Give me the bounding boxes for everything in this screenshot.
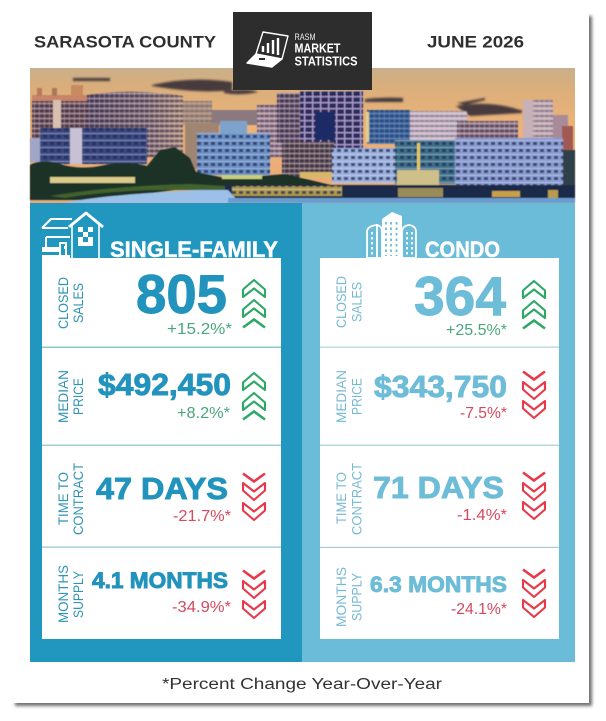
row: time to contract: -1.4%* [457, 507, 507, 524]
row: time to contract: -21.7%* [173, 508, 231, 525]
row: months supply: MONTHS [334, 567, 349, 627]
row: closed sales: +25.5%* [446, 322, 507, 339]
panel heading: single-family: SINGLE-FAMILY [110, 237, 278, 262]
heading: date: JUNE 2026 [427, 32, 524, 52]
panel heading: condo: CONDO [425, 237, 500, 262]
row: closed sales [56, 263, 265, 338]
footnote: *Percent Change Year-Over-Year [162, 676, 442, 693]
icon: house [42, 213, 103, 258]
row: months supply: 6.3 MONTHS [370, 572, 507, 597]
row: median price [334, 369, 545, 423]
row: months supply: SUPPLY [350, 573, 364, 621]
photo: Sarasota skyline at dusk [30, 68, 575, 203]
row: months supply: -24.1%* [451, 601, 507, 618]
row: median price: PRICE [71, 378, 86, 415]
row: median price: +8.2%* [177, 405, 230, 422]
row: closed sales [334, 265, 545, 339]
row: time to contract [334, 463, 545, 535]
row: time to contract: 47 DAYS [96, 471, 228, 506]
row: time to contract: TIME TO [334, 472, 349, 524]
panel: condo [302, 203, 575, 662]
row: time to contract: CONTRACT [71, 463, 86, 535]
skyline far [212, 110, 257, 125]
logo badge: RASM Market Statistics: RASM [294, 32, 316, 42]
logo badge: RASM Market Statistics: STATISTICS [294, 54, 358, 68]
row: median price: -7.5%* [460, 405, 507, 422]
row: time to contract: 71 DAYS [373, 470, 504, 505]
row: months supply: SUPPLY [71, 571, 86, 618]
icon: laptop with bar chart [247, 32, 288, 67]
row: months supply [56, 565, 265, 623]
row: median price: MEDIAN [56, 370, 71, 423]
heading: county: SARASOTA COUNTY [34, 32, 217, 52]
logo badge: RASM Market Statistics [233, 12, 372, 90]
row: closed sales: SALES [71, 283, 86, 323]
row: median price: PRICE [350, 378, 364, 415]
row: closed sales: CLOSED [334, 276, 349, 328]
row: median price: $343,750 [374, 369, 507, 404]
panel: single-family [30, 203, 302, 662]
row: median price: $492,450 [98, 367, 231, 402]
white stats card [42, 258, 281, 639]
row: time to contract [56, 463, 265, 535]
logo badge: RASM Market Statistics: MARKET [294, 42, 341, 56]
row: median price: MEDIAN [334, 370, 349, 423]
row: months supply: -34.9%* [172, 599, 231, 616]
white stats card [320, 258, 559, 639]
row: closed sales: 805 [136, 263, 227, 325]
row: months supply [334, 567, 545, 627]
row: months supply: 4.1 MONTHS [92, 568, 228, 593]
row: time to contract: TIME TO [56, 472, 71, 525]
row: months supply: MONTHS [56, 565, 71, 623]
row: median price [56, 367, 265, 423]
row: closed sales: SALES [350, 282, 364, 322]
icon: condo towers [367, 212, 416, 258]
row: closed sales: CLOSED [56, 277, 71, 329]
row: time to contract: CONTRACT [350, 463, 364, 535]
row: closed sales: +15.2%* [167, 321, 232, 338]
trees and shore [30, 147, 575, 200]
row: closed sales: 364 [414, 265, 506, 327]
